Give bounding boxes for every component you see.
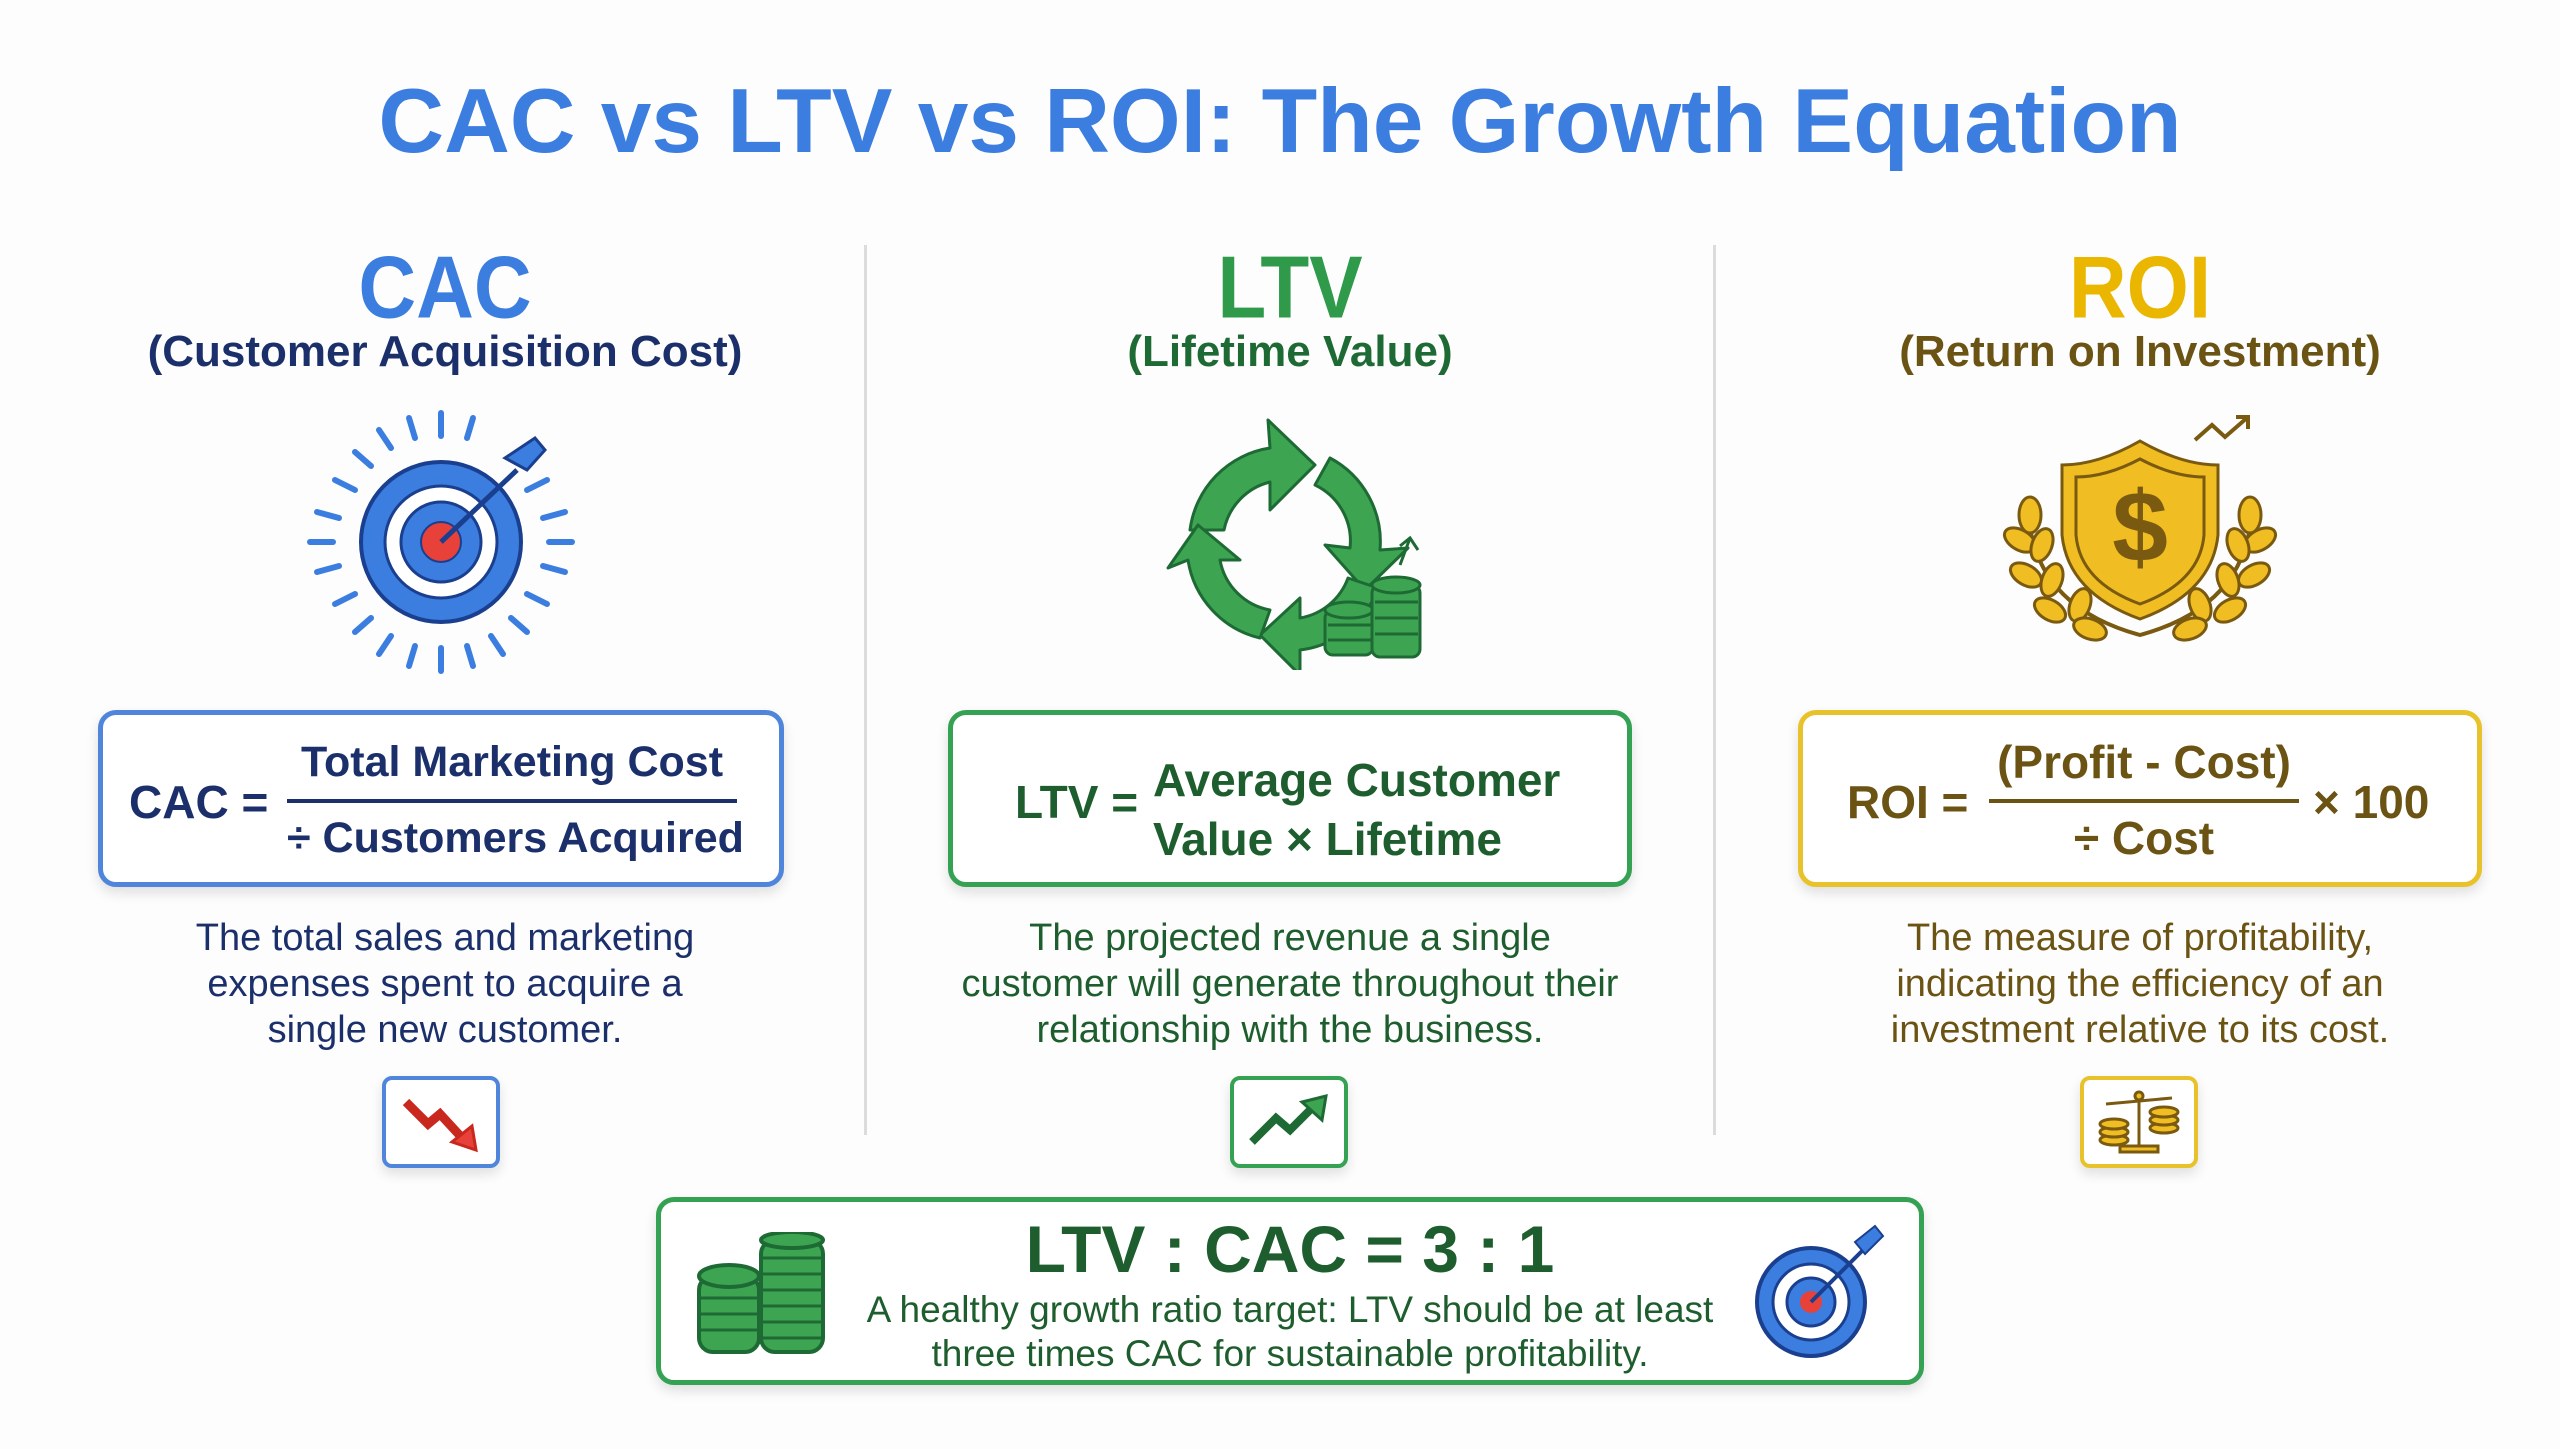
callout: LTV:CAC ratio bbox=[656, 1197, 1924, 1385]
icon: balance scale bbox=[2080, 1076, 2198, 1168]
icon: cycle arrows with coins bbox=[1166, 418, 1422, 670]
ratio description bbox=[866, 1289, 1713, 1374]
description: ROI bbox=[1891, 917, 2389, 1051]
formula box: LTV: Value × Lifetime bbox=[1153, 813, 1502, 865]
formula box: LTV bbox=[948, 710, 1632, 887]
formula box: CAC: ÷ Customers Acquired bbox=[287, 814, 744, 862]
heading: CAC: CAC bbox=[358, 238, 532, 336]
formula box: ROI bbox=[1798, 710, 2482, 887]
formula box: ROI: (Profit - Cost) bbox=[1997, 736, 2291, 788]
heading: LTV: LTV bbox=[1217, 238, 1363, 336]
description: ROI: investment relative to its cost. bbox=[1891, 1009, 2389, 1051]
description: LTV: The projected revenue a single bbox=[1029, 917, 1551, 959]
formula box: ROI: ÷ Cost bbox=[2074, 812, 2214, 864]
icon: small target bbox=[1755, 1224, 1884, 1358]
panel: CAC bbox=[94, 238, 788, 1178]
formula box: ROI: × 100 bbox=[2313, 776, 2429, 828]
panel: ROI bbox=[1794, 238, 2486, 1178]
ratio heading: LTV : CAC = 3 : 1 bbox=[1026, 1212, 1554, 1286]
description: CAC bbox=[196, 917, 694, 1051]
subtitle: ROI: (Return on Investment) bbox=[1899, 327, 2381, 376]
panel: LTV bbox=[944, 238, 1636, 1178]
icon: shield with laurels bbox=[2002, 415, 2278, 642]
title: CAC vs LTV vs ROI: The Growth Equation bbox=[378, 71, 2182, 172]
description: ROI: The measure of profitability, bbox=[1907, 917, 2373, 959]
description: LTV: customer will generate throughout their bbox=[962, 963, 1618, 1005]
description: CAC: single new customer. bbox=[268, 1009, 622, 1051]
icon: coin stacks bbox=[697, 1232, 825, 1354]
formula box: CAC bbox=[98, 710, 784, 887]
description: LTV: relationship with the business. bbox=[1037, 1009, 1543, 1051]
icon: up trend bbox=[1230, 1076, 1348, 1168]
formula box: CAC: Total Marketing Cost bbox=[301, 738, 723, 786]
icon: target bbox=[307, 410, 575, 674]
icon: down trend bbox=[382, 1076, 500, 1168]
ratio description: A healthy growth ratio target: LTV should be at least bbox=[867, 1289, 1713, 1330]
formula box: LTV: LTV = bbox=[1015, 776, 1138, 828]
subtitle: LTV: (Lifetime Value) bbox=[1127, 327, 1453, 376]
description: CAC: expenses spent to acquire a bbox=[207, 963, 683, 1005]
heading: ROI: ROI bbox=[2069, 238, 2211, 336]
icon: shield with laurels: $ bbox=[2112, 471, 2168, 583]
formula box: ROI: ROI = bbox=[1847, 776, 1968, 828]
formula box: CAC: CAC = bbox=[129, 776, 268, 828]
description: CAC: The total sales and marketing bbox=[196, 917, 694, 959]
subtitle: CAC: (Customer Acquisition Cost) bbox=[148, 327, 742, 376]
description: ROI: indicating the efficiency of an bbox=[1896, 963, 2384, 1005]
description: LTV bbox=[962, 917, 1618, 1051]
ratio description: three times CAC for sustainable profitability. bbox=[931, 1333, 1648, 1374]
formula box: LTV: Average Customer bbox=[1153, 754, 1560, 806]
